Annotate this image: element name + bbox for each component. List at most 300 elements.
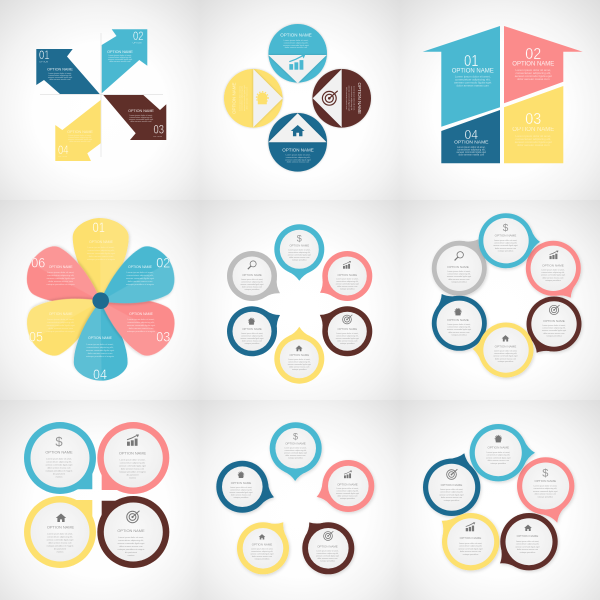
ring teal: dis parturient	[53, 472, 65, 476]
ring brown	[97, 496, 169, 568]
pin yellow: consectetuer adipiscing elit,	[251, 550, 274, 553]
ring brown: aenean commodo ligula eget	[542, 329, 567, 332]
section 02 coral: aenean commodo ligula eget	[515, 74, 552, 78]
arrow 04 yellow: consectetuer adipiscing elit,	[68, 136, 92, 139]
section 03 yellow: consectetuer adipiscing elit,	[516, 137, 551, 141]
flower labels: dolor aenean massa cum	[88, 352, 112, 355]
arrow 04 yellow: 04	[58, 145, 69, 157]
pin navy	[227, 305, 286, 356]
ring brown: montes	[128, 554, 134, 557]
ring teal	[478, 213, 540, 268]
arrow 02 teal: aenean commodo ligula eget	[108, 58, 133, 61]
pin yellow: natoque penatibus	[292, 368, 307, 371]
section 03 yellow	[504, 86, 563, 163]
section 03 yellow: OPTION NAME	[512, 127, 554, 133]
flower labels: consectetuer adipiscing elit,	[127, 274, 154, 277]
arrow 04 yellow	[55, 100, 101, 161]
ring coral: consectetuer adipiscing elit,	[120, 462, 146, 464]
circle yellow: aenean commodo ligula eget	[243, 85, 246, 111]
flower labels: OPTION NAME	[128, 265, 153, 269]
pin navy: dolor aenean massa cum	[242, 340, 263, 342]
ring brown: dolor aenean massa cum	[119, 545, 143, 548]
ring navy: natoque penatibus	[444, 499, 459, 502]
flower labels: dolor aenean massa cum	[48, 327, 73, 330]
circle navy: dolor aenean massa cum	[287, 162, 310, 164]
section 03 yellow: aenean commodo ligula eget	[515, 140, 552, 144]
ring yellow: aenean commodo ligula eget	[493, 355, 518, 358]
ring yellow: Lorem ipsum dolor sit amet,	[459, 542, 483, 545]
ring yellow: aenean commodo ligula eget	[47, 538, 74, 542]
arrow 02 teal: OPTION NAME	[107, 50, 133, 54]
pin teal: natoque penatibus	[292, 258, 307, 262]
pin yellow: dolor aenean massa cum	[252, 556, 273, 558]
ring teal	[470, 424, 535, 481]
circle navy: aenean commodo ligula eget	[285, 158, 311, 161]
ring brown: natoque penatibus	[520, 551, 535, 554]
ring coral: dolor aenean massa cum	[542, 276, 564, 279]
pin brown: OPTION NAME	[317, 545, 338, 549]
ring grey: Lorem ipsum dolor sit amet,	[447, 270, 471, 273]
pin teal	[270, 422, 322, 481]
pin teal: consectetuer adipiscing elit,	[284, 449, 307, 452]
ring coral: $	[542, 468, 548, 480]
ring teal: OPTION NAME	[487, 446, 509, 450]
pin coral: aenean commodo ligula eget	[336, 282, 359, 286]
pin teal: dolor aenean massa cum	[285, 455, 306, 457]
circle navy: consectetuer adipiscing elit,	[286, 156, 311, 159]
ring coral	[97, 422, 169, 494]
ring grey	[432, 233, 488, 296]
flower labels: Lorem ipsum dolor sit amet,	[88, 246, 115, 249]
pin brown: aenean commodo ligula eget	[316, 554, 340, 558]
ring brown: Lorem ipsum dolor sit amet,	[516, 540, 540, 543]
ring coral	[517, 457, 574, 527]
pin teal: aenean commodo ligula eget	[288, 254, 311, 256]
pin teal: Lorem ipsum dolor sit amet,	[284, 446, 307, 450]
ring navy: consectetuer adipiscing elit,	[440, 491, 464, 494]
section 01 teal: Lorem ipsum dolor sit amet,	[455, 74, 491, 78]
ring navy: consectetuer adipiscing elit,	[447, 326, 471, 329]
ring teal: Lorem ipsum dolor sit amet,	[46, 458, 72, 460]
arrow 01 navy: OPTION NAME	[47, 68, 73, 72]
pin yellow	[237, 515, 292, 574]
ring navy: natoque penatibus	[451, 333, 467, 336]
pin teal: Lorem ipsum dolor sit amet,	[288, 248, 311, 252]
pin coral: dolor aenean massa cum	[337, 496, 358, 498]
flower labels: dolor aenean massa cum	[129, 327, 153, 330]
circle teal: aenean commodo ligula eget	[283, 44, 309, 47]
section 02 coral: dolor aenean massa cum	[517, 77, 550, 81]
ring coral: consectetuer adipiscing elit,	[534, 487, 557, 490]
ring teal: consectetuer adipiscing elit,	[46, 460, 72, 464]
flower labels: OPTION NAME	[88, 336, 113, 340]
ring teal: dolor aenean massa cum	[495, 247, 517, 250]
flower labels: 02	[156, 255, 170, 271]
ring teal: aenean commodo ligula eget	[486, 456, 511, 459]
panel: pinwheel arrows	[36, 29, 166, 161]
ring brown: Lorem ipsum dolor sit amet,	[118, 536, 144, 539]
pin yellow: aenean commodo ligula eget	[250, 552, 274, 556]
flower labels: 04	[93, 366, 107, 382]
ring grey: aenean commodo ligula eget	[447, 275, 472, 278]
pin yellow: OPTION NAME	[252, 542, 272, 546]
ring teal: consectetuer adipiscing elit,	[487, 454, 510, 457]
pin yellow: aenean commodo ligula eget	[288, 363, 311, 366]
pin coral: Lorem ipsum dolor sit amet,	[336, 278, 359, 280]
arrow 04 yellow: OPTION NAME	[67, 130, 93, 134]
flower labels: aenean commodo ligula eget	[47, 277, 75, 280]
pin coral: OPTION NAME	[337, 482, 358, 486]
arrow 01 navy	[36, 49, 100, 94]
ring coral: aenean commodo ligula eget	[533, 490, 558, 493]
pin coral	[314, 251, 372, 302]
ring navy: dolor aenean massa cum	[441, 496, 463, 499]
section 04 navy: dolor aenean massa cum	[458, 154, 484, 156]
ring yellow	[472, 322, 534, 378]
flower labels: OPTION NAME	[89, 240, 114, 244]
pin coral: natoque penatibus	[340, 288, 355, 290]
flower labels: consectetuer adipiscing elit,	[87, 346, 114, 349]
ring yellow: consectetuer adipiscing elit,	[494, 352, 518, 355]
pin navy: Lorem ipsum dolor sit amet,	[241, 332, 264, 335]
pin brown: dolor aenean massa cum	[317, 558, 338, 560]
pin grey: OPTION NAME	[242, 273, 262, 277]
arrow 04 yellow: Lorem ipsum dolor sit amet,	[68, 134, 92, 137]
panel: six linked rings	[431, 213, 582, 378]
ring brown: aenean commodo ligula eget	[118, 542, 145, 545]
arrow 01 navy: dolor aenean massa cum	[49, 78, 71, 81]
pin brown: natoque penatibus	[340, 342, 355, 345]
ring coral: OPTION NAME	[542, 264, 564, 268]
flower labels: natoque penatibus et magnis	[86, 355, 115, 358]
pin coral	[313, 460, 374, 512]
ring navy: Lorem ipsum dolor sit amet,	[440, 488, 464, 491]
arrow 02 teal: Lorem ipsum dolor sit amet,	[108, 54, 132, 57]
arrow 02 teal: OPTION	[133, 42, 142, 44]
arrow 03 brown: 03	[153, 124, 164, 136]
pin brown: Lorem ipsum dolor sit amet,	[316, 550, 339, 552]
circle navy: OPTION NAME	[282, 147, 314, 152]
pin brown	[300, 516, 354, 574]
petal 03 coral	[88, 277, 183, 363]
section 02 coral: consectetuer adipiscing elit,	[516, 71, 551, 75]
ring coral: natoque penatibus	[545, 279, 561, 282]
flower labels: natoque penatibus et magnis	[126, 283, 155, 286]
pin yellow	[274, 327, 324, 384]
flower labels: aenean commodo ligula eget	[126, 277, 154, 280]
ring teal: natoque penatibus	[498, 249, 513, 252]
section 04 navy: Lorem ipsum dolor sit amet,	[457, 146, 486, 149]
flower labels: 06	[31, 255, 45, 271]
ring teal: natoque penatibus	[491, 462, 506, 465]
panel: flower	[18, 218, 183, 382]
section 04 navy: aenean commodo ligula eget	[457, 151, 486, 154]
ring coral: montes	[129, 476, 136, 480]
section 04 navy: consectetuer adipiscing elit,	[457, 148, 486, 152]
arrow 01 navy: Lorem ipsum dolor sit amet,	[48, 72, 72, 75]
panel: four large rings	[24, 422, 169, 568]
pin coral: Lorem ipsum dolor sit amet,	[336, 487, 359, 490]
pin brown: consectetuer adipiscing elit,	[316, 552, 339, 555]
flower labels: 03	[156, 329, 170, 345]
arrow 01 navy: aenean commodo ligula eget	[48, 76, 73, 79]
pin teal: $	[297, 234, 302, 244]
ring teal: dolor aenean massa cum	[488, 459, 509, 462]
pin navy: aenean commodo ligula eget	[240, 337, 264, 340]
ring teal: montes	[56, 476, 62, 478]
panel: five linked rings	[423, 424, 574, 574]
circle teal: Lorem ipsum dolor sit amet,	[284, 39, 309, 42]
ring teal: OPTION NAME	[45, 450, 73, 454]
arrow 01 navy: consectetuer adipiscing elit,	[48, 74, 72, 77]
ring teal: $	[503, 223, 509, 234]
ring coral: OPTION NAME	[534, 479, 556, 483]
arrow 04 yellow: aenean commodo ligula eget	[68, 138, 93, 141]
pin navy: consectetuer adipiscing elit,	[230, 488, 253, 492]
ring yellow: dolor aenean massa cum	[48, 542, 72, 544]
pin brown: dolor aenean massa cum	[337, 340, 358, 342]
pin coral: OPTION NAME	[338, 273, 357, 277]
ring navy	[431, 288, 487, 351]
ring brown: dolor aenean massa cum	[543, 332, 565, 335]
section 04 navy	[441, 110, 500, 163]
circle teal: dolor aenean massa cum	[285, 47, 308, 49]
flower center	[92, 292, 109, 309]
section 03 yellow: dolor aenean massa cum	[517, 143, 550, 147]
panel: house arrow	[423, 26, 583, 163]
ring teal: Lorem ipsum dolor sit amet,	[487, 451, 510, 454]
ring brown: consectetuer adipiscing elit,	[516, 543, 540, 546]
flower labels: consectetuer adipiscing elit,	[88, 249, 115, 252]
arrow 01 navy: 01	[39, 50, 50, 62]
pin grey: dolor aenean massa cum	[242, 286, 263, 288]
panel: four circles with triangles	[224, 24, 371, 172]
ring yellow	[434, 510, 499, 570]
section 01 teal: dolor aenean massa cum	[456, 84, 490, 88]
pin yellow: consectetuer adipiscing elit,	[288, 360, 311, 364]
pin brown: Lorem ipsum dolor sit amet,	[336, 332, 359, 335]
flower labels: consectetuer adipiscing elit,	[47, 274, 75, 277]
arrow 03 brown: consectetuer adipiscing elit,	[129, 116, 153, 119]
section 02 coral: 02	[525, 46, 541, 63]
ring coral: dis parturient	[126, 474, 139, 476]
ring brown: aenean commodo ligula eget	[515, 545, 540, 548]
ring coral	[526, 241, 581, 304]
flower labels: Lorem ipsum dolor sit amet,	[86, 343, 114, 346]
section 04 navy: 04	[465, 128, 478, 142]
ring teal: dolor aenean massa cum	[47, 466, 71, 470]
ring teal: OPTION NAME	[495, 234, 516, 238]
pin coral: consectetuer adipiscing elit,	[336, 490, 359, 492]
panel: five pins	[216, 422, 374, 574]
arrow 04 yellow: dolor aenean massa cum	[69, 140, 91, 143]
pin navy: consectetuer adipiscing elit,	[241, 334, 264, 338]
ring coral: consectetuer adipiscing elit,	[541, 271, 565, 274]
circle teal: consectetuer adipiscing elit,	[284, 41, 309, 44]
ring teal	[24, 422, 96, 494]
pin teal: consectetuer adipiscing elit,	[288, 251, 311, 254]
flower labels: 05	[29, 329, 43, 345]
circle navy: Lorem ipsum dolor sit amet,	[286, 154, 311, 156]
flower labels: OPTION NAME	[129, 312, 154, 316]
ring coral: aenean commodo ligula eget	[541, 274, 566, 277]
pin yellow: OPTION NAME	[290, 353, 309, 357]
pin teal: OPTION NAME	[285, 442, 306, 446]
flower labels: OPTION NAME	[49, 312, 73, 316]
pin navy	[216, 461, 278, 513]
ring navy: aenean commodo ligula eget	[439, 493, 464, 496]
ring yellow: natoque penatibus et magnis	[47, 544, 73, 548]
flower labels: Lorem ipsum dolor sit amet,	[47, 271, 75, 274]
flower labels: Lorem ipsum dolor sit amet,	[47, 318, 75, 321]
petal 02 teal	[88, 239, 183, 325]
circle brown: aenean commodo ligula eget	[347, 85, 350, 112]
pin grey: consectetuer adipiscing elit,	[241, 280, 264, 284]
ring brown: natoque penatibus et magnis	[118, 548, 144, 551]
section 01 teal: consectetuer adipiscing elit,	[455, 78, 491, 82]
ring navy	[423, 449, 480, 516]
arrow 03 brown: Lorem ipsum dolor sit amet,	[129, 114, 153, 117]
ring coral: Lorem ipsum dolor sit amet,	[120, 458, 146, 462]
arrow 02 teal: consectetuer adipiscing elit,	[108, 56, 132, 59]
flower labels: aenean commodo ligula eget	[127, 324, 155, 327]
ring yellow: OPTION NAME	[47, 524, 75, 530]
ring yellow: natoque penatibus	[463, 553, 478, 556]
pin teal: natoque penatibus	[288, 456, 303, 460]
circle yellow: Lorem ipsum dolor sit amet,	[238, 86, 241, 111]
circle teal: OPTION NAME	[280, 33, 312, 38]
pin navy: dolor aenean massa cum	[231, 494, 252, 496]
circle navy	[268, 113, 327, 172]
flower labels: consectetuer adipiscing elit,	[47, 321, 75, 324]
section 02 coral: Lorem ipsum dolor sit amet,	[515, 68, 551, 72]
ring navy: Lorem ipsum dolor sit amet,	[447, 323, 471, 326]
flower labels: 01	[92, 219, 105, 235]
ring yellow: Lorem ipsum dolor sit amet,	[47, 532, 73, 536]
ring yellow: consectetuer adipiscing elit,	[47, 536, 73, 538]
section 01 teal: 01	[464, 53, 479, 70]
circle brown	[312, 69, 371, 128]
ring yellow: dolor aenean massa cum	[460, 550, 482, 553]
pin brown: natoque penatibus	[320, 560, 335, 562]
ring teal: aenean commodo ligula eget	[46, 464, 73, 466]
ring grey: natoque penatibus	[451, 280, 467, 283]
flower labels: natoque penatibus et magnis	[127, 330, 156, 333]
ring brown: natoque penatibus	[546, 334, 562, 337]
pin navy: Lorem ipsum dolor sit amet,	[230, 486, 253, 489]
ring brown: consectetuer adipiscing elit,	[118, 539, 144, 542]
pin yellow: natoque penatibus	[255, 558, 269, 560]
flower labels: dolor aenean massa cum	[48, 280, 73, 283]
ring navy: aenean commodo ligula eget	[447, 328, 472, 331]
arrow 03 brown: dolor aenean massa cum	[130, 120, 152, 123]
ring yellow: Lorem ipsum dolor sit amet,	[494, 350, 518, 352]
arrow 02 teal	[102, 29, 147, 93]
flower labels: consectetuer adipiscing elit,	[128, 321, 155, 324]
pin teal: $	[293, 432, 298, 442]
pin teal: OPTION NAME	[290, 244, 309, 248]
pin brown: aenean commodo ligula eget	[336, 337, 359, 340]
ring brown: OPTION NAME	[517, 534, 538, 538]
circle yellow	[224, 69, 283, 128]
pin yellow: Lorem ipsum dolor sit amet,	[288, 358, 311, 361]
pin navy: OPTION NAME	[231, 481, 251, 485]
circle yellow: OPTION NAME	[232, 83, 237, 114]
ring grey: OPTION NAME	[447, 265, 469, 269]
ring teal: Lorem ipsum dolor sit amet,	[494, 239, 518, 242]
ring yellow: dis parturient	[54, 548, 66, 550]
flower labels: OPTION NAME	[49, 265, 73, 269]
pin yellow: Lorem ipsum dolor sit amet,	[251, 548, 274, 550]
ring yellow	[24, 496, 96, 568]
flower labels: dolor aenean massa cum	[128, 280, 152, 283]
pin yellow: dolor aenean massa cum	[289, 366, 310, 368]
ring coral: OPTION NAME	[119, 450, 147, 456]
ring brown: OPTION NAME	[117, 528, 145, 533]
ring yellow: consectetuer adipiscing elit,	[459, 545, 483, 548]
section 02 coral: OPTION NAME	[512, 61, 554, 67]
pin teal: dolor aenean massa cum	[289, 257, 310, 259]
ring brown	[492, 513, 558, 574]
section 01 teal: OPTION NAME	[452, 69, 494, 75]
section 01 teal	[423, 26, 500, 127]
ring teal: natoque penatibus et magnis	[46, 470, 72, 472]
pin grey: aenean commodo ligula eget	[240, 283, 264, 286]
ring teal: aenean commodo ligula eget	[493, 244, 518, 247]
section 03 yellow: 03	[525, 111, 541, 128]
flower labels: aenean commodo ligula eget	[47, 324, 75, 327]
pin navy: natoque penatibus	[245, 342, 259, 345]
pin coral: aenean commodo ligula eget	[336, 492, 360, 495]
pin navy: natoque penatibus	[234, 496, 248, 499]
circle brown: consectetuer adipiscing elit,	[350, 86, 353, 111]
arrow 03 brown: aenean commodo ligula eget	[129, 118, 154, 121]
ring coral: dolor aenean massa cum	[535, 493, 556, 496]
panel: six pins ring	[227, 224, 372, 384]
flower labels: natoque penatibus et magnis	[87, 258, 116, 261]
pin coral: natoque penatibus	[340, 497, 355, 500]
circle yellow: consectetuer adipiscing elit,	[241, 86, 244, 111]
pin brown: consectetuer adipiscing elit,	[336, 334, 359, 338]
ring navy: dolor aenean massa cum	[448, 331, 470, 334]
pin navy: aenean commodo ligula eget	[229, 491, 253, 494]
petal 04 teal	[74, 301, 128, 381]
section 02 coral	[504, 26, 583, 103]
ring teal: $	[55, 434, 63, 449]
petal 06 coral	[18, 239, 114, 325]
ring coral: aenean commodo ligula eget	[119, 464, 146, 468]
section 03 yellow: Lorem ipsum dolor sit amet,	[515, 134, 551, 138]
arrow 02 teal: 02	[133, 31, 144, 43]
arrow 01 navy: OPTION	[39, 62, 48, 64]
pin grey: Lorem ipsum dolor sit amet,	[241, 278, 264, 281]
flower labels: dolor aenean massa cum	[89, 255, 113, 258]
ring brown: dis parturient	[125, 551, 137, 554]
circle yellow: dolor aenean massa cum	[247, 87, 249, 110]
arrow 04 yellow: OPTION	[58, 156, 67, 158]
ring brown: Lorem ipsum dolor sit amet,	[542, 324, 566, 327]
ring grey: consectetuer adipiscing elit,	[447, 273, 471, 276]
pin grey	[227, 251, 286, 303]
flower labels	[29, 219, 170, 382]
ring yellow: natoque penatibus	[498, 360, 513, 363]
pin brown	[314, 305, 372, 356]
ring coral: natoque penatibus et magnis	[119, 470, 146, 474]
ring yellow: montes	[57, 550, 63, 554]
pin teal	[274, 224, 324, 281]
ring yellow: aenean commodo ligula eget	[458, 547, 483, 550]
ring coral: natoque penatibus	[538, 495, 553, 498]
